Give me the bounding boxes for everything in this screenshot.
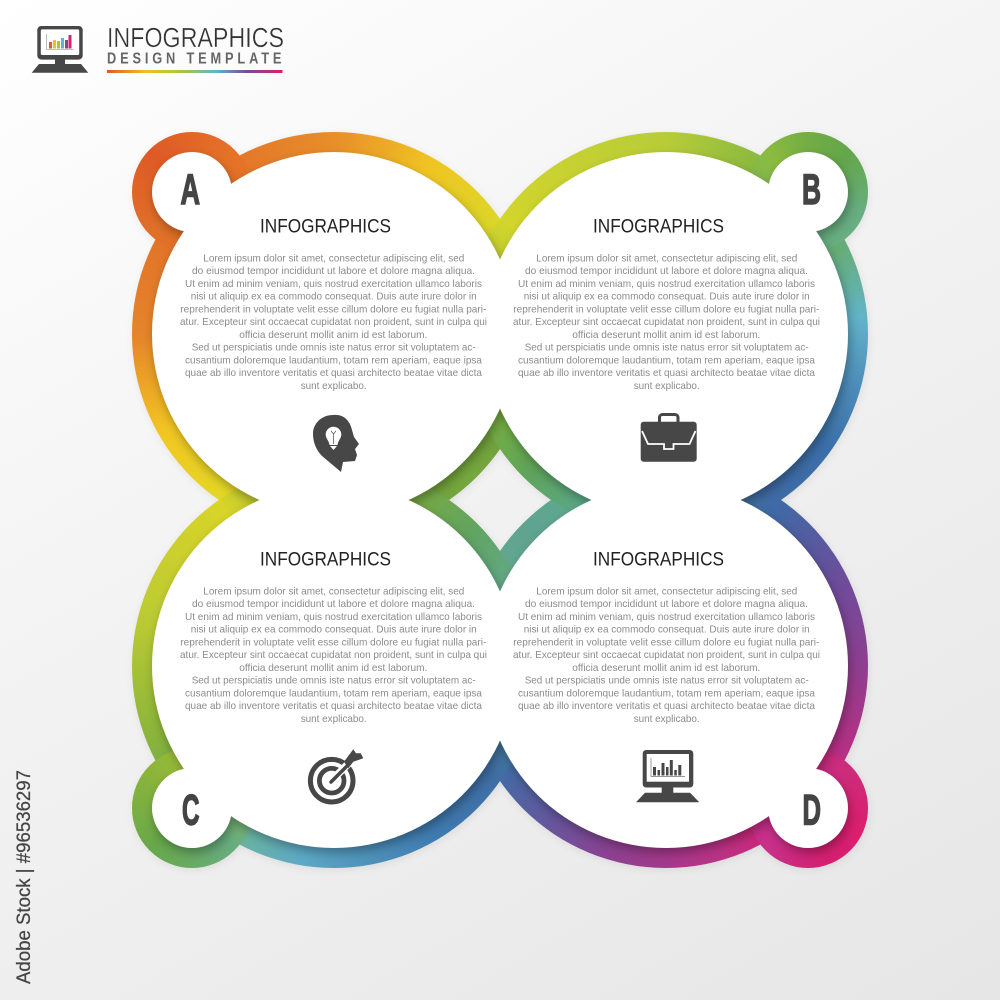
badge letter B: B — [802, 166, 821, 214]
body text C: cusantium doloremque laudantium, totam rem aperiam, eaque ipsa — [185, 688, 482, 699]
body text A: cusantium doloremque laudantium, totam rem aperiam, eaque ipsa — [185, 355, 482, 366]
heading A: INFOGRAPHICS — [260, 215, 391, 237]
small ring A — [132, 132, 252, 252]
body text D: nisi ut aliquip ex ea commodo consequat. Duis aute irure dolor in — [524, 625, 810, 636]
ring A large — [132, 132, 536, 536]
small ring D — [748, 748, 868, 868]
body text C: Ut enim ad minim veniam, quis nostrud exercitation ullamco laboris — [185, 612, 482, 623]
panel A disc — [152, 152, 516, 516]
body text A: Sed ut perspiciatis unde omnis iste natus error sit voluptatem ac- — [192, 343, 476, 354]
panel B disc — [484, 152, 848, 516]
body text C: quae ab illo inventore veritatis et quasi architecto beatae vitae dicta — [185, 701, 482, 712]
badge letter D: D — [802, 786, 821, 834]
body text D: Sed ut perspiciatis unde omnis iste natus error sit voluptatem ac- — [525, 676, 809, 687]
badge B disc — [768, 152, 848, 232]
body text C: sunt explicabo. — [301, 714, 367, 725]
body text A: Lorem ipsum dolor sit amet, consectetur adipiscing elit, sed — [203, 254, 465, 264]
subtitle text: DESIGN TEMPLATE — [107, 50, 282, 68]
badge A disc — [152, 152, 232, 232]
ring B large — [464, 132, 868, 536]
panel C content — [180, 548, 487, 834]
panel C disc — [152, 484, 516, 848]
body text A — [180, 254, 487, 392]
ring C large — [132, 464, 536, 868]
body text A: Ut enim ad minim veniam, quis nostrud exercitation ullamco laboris — [185, 279, 482, 290]
body text C: Lorem ipsum dolor sit amet, consectetur adipiscing elit, sed — [203, 586, 465, 598]
heading D: INFOGRAPHICS — [593, 548, 724, 570]
body text D — [513, 586, 820, 725]
panel D disc — [484, 484, 848, 848]
body text B: do eiusmod tempor incididunt ut labore et dolore magna aliqua. — [525, 266, 808, 277]
body text A: do eiusmod tempor incididunt ut labore et dolore magna aliqua. — [192, 266, 475, 277]
body text C: nisi ut aliquip ex ea commodo consequat. Duis aute irure dolor in — [191, 625, 477, 636]
body text D: atur. Excepteur sint occaecat cupidatat non proident, sunt in culpa qui — [513, 650, 820, 661]
body text B: nisi ut aliquip ex ea commodo consequat. Duis aute irure dolor in — [524, 292, 810, 303]
stock id text: Adobe Stock | #96536297 — [14, 770, 35, 984]
body text A: officia deserunt mollit anim id est laborum. — [239, 330, 427, 341]
badge letter A: A — [180, 166, 200, 214]
body text C — [180, 586, 487, 725]
badge C disc — [152, 768, 232, 848]
ring D large — [464, 464, 868, 868]
rainbow rule — [107, 70, 282, 73]
body text D: Ut enim ad minim veniam, quis nostrud exercitation ullamco laboris — [518, 612, 815, 623]
body text A: atur. Excepteur sint occaecat cupidatat non proident, sunt in culpa qui — [180, 317, 487, 328]
body text D: do eiusmod tempor incididunt ut labore et dolore magna aliqua. — [525, 599, 808, 610]
small ring B — [748, 132, 868, 252]
small ring C — [132, 748, 252, 868]
body text D: quae ab illo inventore veritatis et quasi architecto beatae vitae dicta — [518, 701, 815, 712]
badge D disc — [768, 768, 848, 848]
body text B: atur. Excepteur sint occaecat cupidatat non proident, sunt in culpa qui — [513, 317, 820, 328]
title text: INFOGRAPHICS — [107, 22, 284, 53]
icon: target with arrow — [310, 749, 363, 802]
heading B: INFOGRAPHICS — [593, 215, 724, 237]
body text C: do eiusmod tempor incididunt ut labore et dolore magna aliqua. — [192, 599, 475, 610]
heading C: INFOGRAPHICS — [260, 548, 391, 570]
body text C: atur. Excepteur sint occaecat cupidatat non proident, sunt in culpa qui — [180, 650, 487, 661]
body text B: Sed ut perspiciatis unde omnis iste natus error sit voluptatem ac- — [525, 343, 809, 354]
body text B: Ut enim ad minim veniam, quis nostrud exercitation ullamco laboris — [518, 279, 815, 290]
badge letter C: C — [182, 786, 200, 834]
body text D: Lorem ipsum dolor sit amet, consectetur adipiscing elit, sed — [536, 586, 798, 598]
body text C: reprehenderit in voluptate velit esse cillum dolore eu fugiat nulla pari- — [180, 637, 486, 648]
body text A: sunt explicabo. — [301, 381, 367, 392]
icon: briefcase — [641, 414, 697, 462]
panel B content — [513, 166, 821, 462]
header logo — [32, 22, 284, 73]
body text B: officia deserunt mollit anim id est laborum. — [572, 330, 760, 341]
icon: head with light bulb — [313, 415, 359, 472]
icon: monitor with bar chart — [636, 750, 699, 802]
body text D: officia deserunt mollit anim id est laborum. — [572, 663, 760, 674]
body text B: cusantium doloremque laudantium, totam rem aperiam, eaque ipsa — [518, 355, 815, 366]
body text D: sunt explicabo. — [634, 714, 700, 725]
body text A: quae ab illo inventore veritatis et quasi architecto beatae vitae dicta — [185, 368, 482, 379]
icon: monitor with chart — [32, 26, 88, 73]
panel A content — [180, 166, 487, 472]
panel D content — [513, 548, 821, 834]
body text A: nisi ut aliquip ex ea commodo consequat. Duis aute irure dolor in — [191, 292, 477, 303]
body text B: reprehenderit in voluptate velit esse cillum dolore eu fugiat nulla pari- — [513, 304, 819, 315]
body text B: sunt explicabo. — [634, 381, 700, 392]
body text B: Lorem ipsum dolor sit amet, consectetur adipiscing elit, sed — [536, 254, 798, 264]
body text D: cusantium doloremque laudantium, totam rem aperiam, eaque ipsa — [518, 688, 815, 699]
body text B: quae ab illo inventore veritatis et quasi architecto beatae vitae dicta — [518, 368, 815, 379]
body text D: reprehenderit in voluptate velit esse cillum dolore eu fugiat nulla pari- — [513, 637, 819, 648]
body text B — [513, 254, 820, 392]
body text C: Sed ut perspiciatis unde omnis iste natus error sit voluptatem ac- — [192, 676, 476, 687]
body text A: reprehenderit in voluptate velit esse cillum dolore eu fugiat nulla pari- — [180, 304, 486, 315]
body text C: officia deserunt mollit anim id est laborum. — [239, 663, 427, 674]
